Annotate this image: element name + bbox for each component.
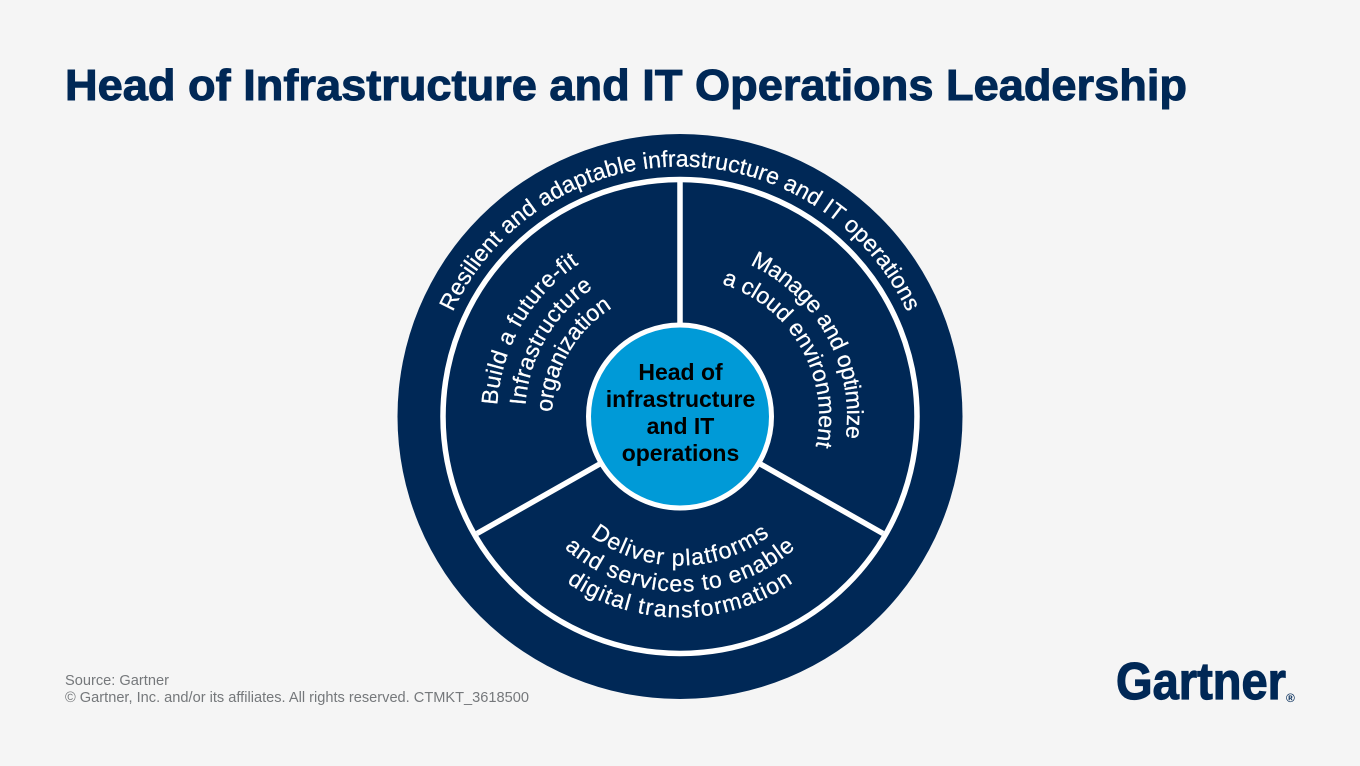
sector: build organization: Infrastructure [510,280,591,404]
sector: manage cloud: a cloud environment [723,274,832,449]
sector dividers [477,180,883,534]
source note [65,673,529,706]
sector: deliver platforms: digital transformation [569,573,792,618]
centre circle: and IT [647,413,714,439]
outer ring [398,134,962,699]
Gartner logo: Gartner [1116,653,1286,711]
source note: Source: Gartner [65,673,169,689]
sector: manage cloud: Manage and optimize [752,251,864,438]
centre circle: Head of [638,359,723,385]
centre circle [588,325,772,508]
title: Head of Infrastructure and IT Operations Leadership [65,61,1187,110]
sector: build organization: Build a future-fit [481,252,579,404]
centre circle: operations [622,440,739,466]
centre circle: infrastructure [606,386,755,412]
circular diagram [398,134,962,699]
Gartner logo: ® [1286,691,1295,705]
sector: deliver platforms: Deliver platforms [592,524,768,570]
sector: deliver platforms [566,524,794,618]
sector: deliver platforms: and services to enable [566,540,794,592]
outer ring label: Resilient and adaptable infrastructure and IT operations [439,150,917,311]
sector: build organization: organization [540,300,611,411]
source note: © Gartner, Inc. and/or its affiliates. All rights reserved. CTMKT_3618500 [65,690,529,706]
inner white ring [443,180,917,654]
